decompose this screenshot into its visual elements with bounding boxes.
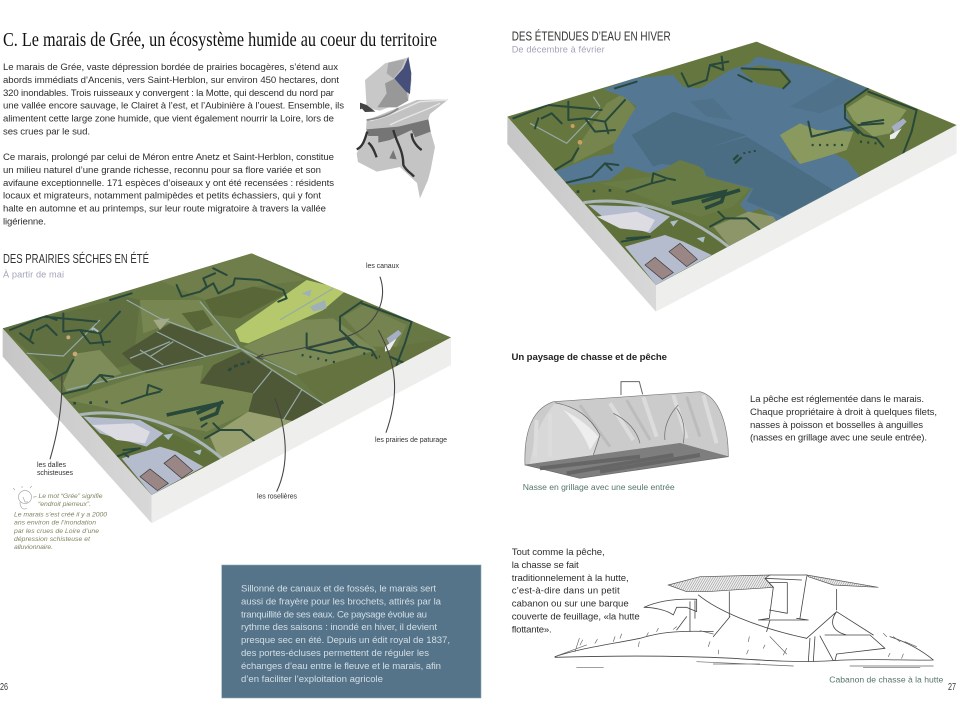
panel: blue callout: Sillonné de canaux et de fossés, le marais sert bbox=[241, 584, 436, 594]
heading: winter: DES ÉTENDUES D’EAU EN HIVER bbox=[512, 29, 671, 44]
panel: blue callout: aussi de frayère pour les brochets, attirés par la bbox=[241, 596, 442, 607]
text block: introduction: halte en automne et au printemps, sur leur route migratoire à travers la vallée bbox=[3, 204, 326, 214]
text block: hunting: traditionnelement à la hutte, bbox=[512, 573, 629, 584]
leader: prairies bbox=[375, 330, 447, 444]
text block: introduction: 320 inondables. Trois ruisseaux y convergent : la Motte, qui descend du nord par bbox=[3, 88, 335, 99]
panel: blue callout: tranquillité de ses eaux. Ce paysage évolue au bbox=[241, 609, 427, 620]
text block: introduction: alimentent cette large zone humide, que vient également nourrir la Loire, lors de bbox=[3, 114, 334, 124]
text block: hunting: Tout comme la pêche, bbox=[512, 547, 605, 558]
caption: fish trap: Nasse en grillage avec une seule entrée bbox=[523, 482, 675, 492]
panel: blue callout: des portes-écluses permettent de réguler les bbox=[241, 648, 429, 659]
note: origin of the name: “endroit pierreux”. bbox=[38, 501, 91, 508]
text block: hunting bbox=[512, 547, 640, 635]
note: origin of the name: - Le mot “Grée” signifie bbox=[34, 493, 103, 500]
text block: hunting: c’est-à-dire dans un petit bbox=[512, 586, 620, 597]
lower corner bbox=[73, 413, 222, 495]
label: les canaux: les canaux bbox=[366, 263, 400, 270]
panel: blue callout: d’en faciliter l’exploitation agricole bbox=[241, 674, 383, 685]
label: les roselières: les roselières bbox=[257, 494, 298, 501]
text block: hunting: cabanon ou sur une barque bbox=[512, 598, 629, 610]
subheading: winter period: De décembre à février bbox=[512, 45, 605, 55]
note: origin of the name: dépression schisteuse et bbox=[14, 536, 91, 543]
canals bbox=[530, 97, 600, 143]
text block: fishing: nasses à poisson et bosselles à anguilles bbox=[750, 420, 923, 431]
text block: introduction: une vallée encore sauvage, le Clairet à l’est, et l’Aubinière à l’ouest. Ensemble, ils bbox=[3, 101, 344, 112]
text block: introduction: Le marais de Grée, vaste dépression bordée de prairies bocagères, s’étend aux bbox=[3, 62, 338, 73]
panel: blue callout: rythme des saisons : inondé en hiver, il devient bbox=[241, 622, 437, 633]
locator map bbox=[357, 57, 448, 198]
text block: introduction: ligérienne. bbox=[3, 216, 46, 228]
lower corner bbox=[631, 246, 730, 285]
label: les dalles schisteuses: les dalles bbox=[37, 462, 66, 469]
panel: blue callout: échanges d’eau entre le fleuve et le marais, afin bbox=[241, 661, 441, 672]
text block: fishing: (nasses en grillage avec une seule entrée). bbox=[750, 433, 927, 444]
text block: introduction: ses crues par le sud. bbox=[3, 126, 90, 138]
leader: les canaux bbox=[257, 263, 400, 359]
note: origin of the name: Le marais s’est créé il y a 2000 bbox=[14, 512, 107, 519]
heading: hunting and fishing: Un paysage de chasse et de pêche bbox=[512, 352, 667, 363]
text block: fishing: Chaque propriétaire à droit à quelques filets, bbox=[750, 407, 937, 418]
note: origin of the name: ans environ de l’inondation bbox=[14, 520, 96, 527]
hedges bbox=[682, 57, 790, 88]
note: origin of the name: alluvionnaire. bbox=[14, 544, 53, 551]
note: origin of the name bbox=[13, 493, 107, 551]
page number 27: 27 bbox=[948, 682, 956, 693]
hedges bbox=[177, 268, 287, 302]
note: origin of the name: par les crues de Loire d’une bbox=[13, 528, 99, 535]
heading: summer: DES PRAIRIES SÉCHES EN ÉTÉ bbox=[3, 251, 149, 266]
panel: blue callout: presque sec en été. Depuis un édit royal de 1837, bbox=[241, 635, 450, 646]
block diagram: summer meadows bbox=[0, 250, 467, 523]
text block: hunting: couverte de feuillage, «la hutte bbox=[512, 611, 640, 622]
text block: introduction: avifaune exceptionnelle. 171 espèces d’oiseaux y ont été recensées : résidents bbox=[3, 178, 334, 189]
icon: light bulb bbox=[13, 486, 35, 509]
text block: fishing bbox=[750, 394, 937, 444]
farm buildings bbox=[387, 330, 402, 345]
text block: introduction: abords immédiats d’Ancenis, vers Saint-Herblon, sur environ 450 hectares, dont bbox=[3, 75, 339, 86]
text block: hunting: la chasse se fait bbox=[512, 560, 579, 571]
illustration: wire fish trap bbox=[525, 382, 728, 478]
canals bbox=[27, 288, 333, 420]
illustration: hunting hut bbox=[555, 575, 933, 667]
text block: hunting: flottante». bbox=[512, 624, 552, 635]
panel: blue callout bbox=[222, 565, 481, 698]
leader: dalles schisteuses bbox=[37, 373, 74, 477]
block diagram: winter flood bbox=[507, 42, 956, 312]
leader: roselières bbox=[257, 398, 298, 501]
text block: fishing: La pêche est réglementée dans le marais. bbox=[750, 394, 924, 405]
label: les prairies de paturage: les prairies de paturage bbox=[375, 437, 447, 444]
leader: dalles schisteuses: schisteuses bbox=[37, 470, 74, 477]
text block: introduction: un milieu naturel d’une grande richesse, reconnu pour sa flore variée et son bbox=[3, 165, 321, 176]
text block: introduction: Ce marais, prolongé par celui de Méron entre Anetz et Saint-Herblon, constitue bbox=[3, 152, 334, 163]
farm buildings bbox=[892, 118, 907, 133]
text block: introduction: locaux et migrateurs, notamment palmipèdes et petits échassiers, qui y font bbox=[3, 191, 321, 202]
caption: hut: Cabanon de chasse à la hutte bbox=[829, 675, 944, 685]
subheading: summer period: À partir de mai bbox=[3, 270, 64, 280]
text block: introduction bbox=[3, 62, 344, 228]
title: C. Le marais de Grée, un écosystème humide au coeur du territoire bbox=[3, 29, 437, 51]
page number 26: 26 bbox=[0, 682, 8, 693]
